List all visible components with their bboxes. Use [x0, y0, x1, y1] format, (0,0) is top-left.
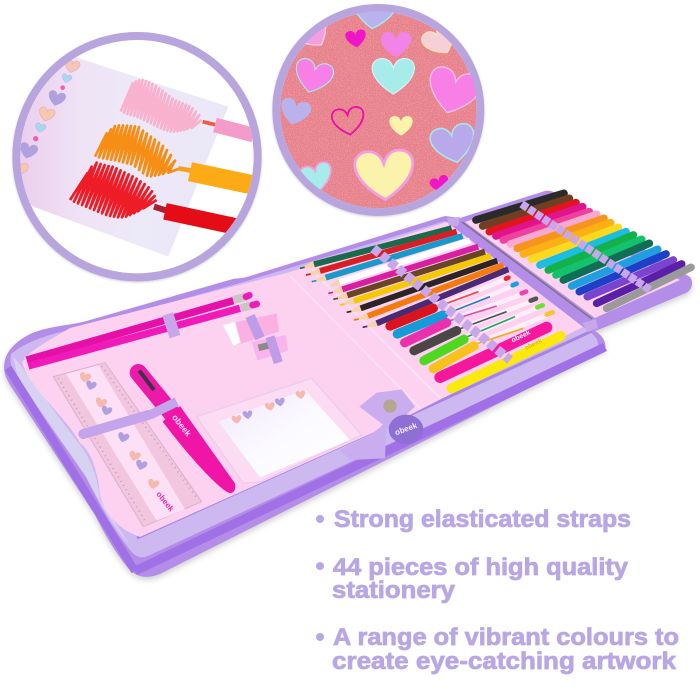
left pane items — [27, 295, 362, 527]
red scribble and marker — [70, 163, 237, 227]
ruler strap — [83, 415, 148, 434]
zip pull and tag: obeek — [394, 421, 419, 437]
pink scribble and marker — [121, 80, 253, 135]
feature: colours — [316, 624, 679, 675]
feature list — [316, 506, 679, 675]
blue-lavender inner band — [13, 356, 130, 545]
case inner collar — [10, 221, 598, 557]
feature: colours: create eye-catching artwork — [332, 648, 677, 675]
colouring pencils — [300, 228, 508, 327]
feature: colours: A range of vibrant colours to — [333, 624, 679, 651]
case outer shell — [4, 191, 692, 577]
pencil case — [4, 191, 692, 577]
notepaper — [0, 56, 228, 257]
highlighters: obeek — [524, 337, 544, 352]
notepad pocket — [197, 378, 362, 483]
zip pull and tag — [340, 389, 423, 460]
gel pens — [390, 278, 553, 369]
pink lining — [22, 222, 583, 537]
elastic strap over pens — [373, 248, 510, 360]
magenta pencils — [27, 295, 257, 366]
elastic strap over markers — [522, 204, 650, 290]
left edge zip — [8, 368, 135, 571]
sharpener — [252, 335, 288, 363]
orange scribble and marker — [95, 125, 253, 185]
metal hinge line — [462, 222, 592, 319]
circle inset: glitter hearts fabric — [270, 0, 490, 220]
right lining — [465, 203, 680, 318]
feature: straps: Strong elasticated straps — [334, 506, 631, 533]
circle inset: marker scribbles — [0, 36, 258, 277]
feature: pieces: stationery — [332, 577, 456, 604]
highlighters: obeek — [510, 329, 532, 344]
felt tip markers — [476, 193, 691, 308]
highlighters — [440, 327, 561, 388]
ruler — [53, 363, 202, 527]
hearts — [281, 12, 476, 202]
eraser — [223, 313, 279, 346]
zip line — [137, 331, 592, 538]
feature: pieces — [316, 554, 629, 604]
feature: pieces: 44 pieces of high quality — [333, 554, 629, 581]
multi colour pen: obeek — [170, 412, 193, 438]
multi colour pen — [138, 371, 235, 493]
paper heart border — [20, 60, 80, 174]
lilac hinge tabs — [447, 217, 598, 332]
ruler: obeek — [154, 490, 176, 514]
spine fold — [290, 270, 440, 408]
